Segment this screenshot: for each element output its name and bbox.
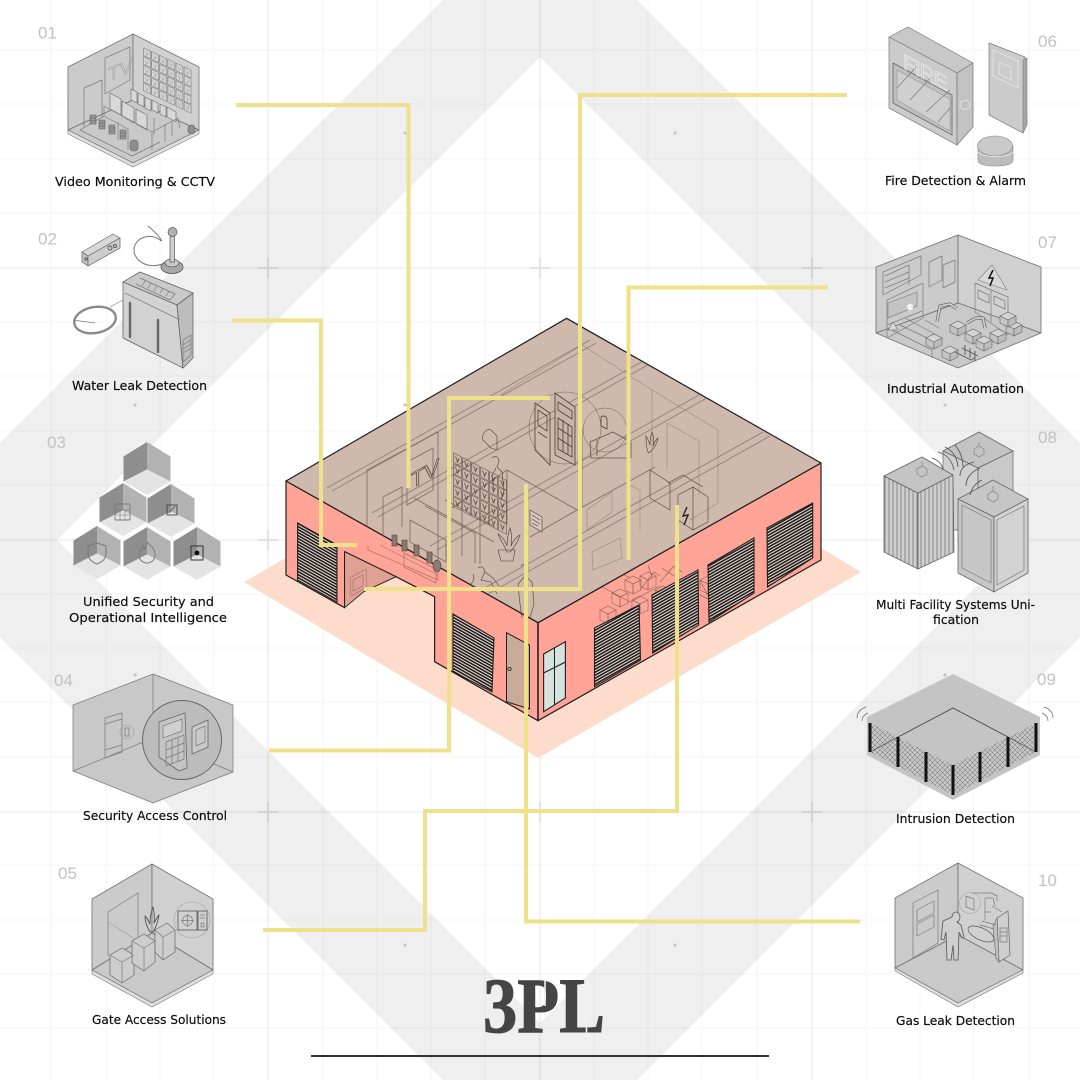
factory interior seen through right wall bbox=[368, 545, 720, 624]
connector: gate access bbox=[263, 505, 677, 930]
label: gate access solutions: Gate Access Solutions bbox=[92, 1012, 226, 1027]
label: multi facility bbox=[876, 597, 1035, 627]
number 10: 10 bbox=[1038, 871, 1057, 890]
number 02: 02 bbox=[38, 230, 57, 248]
shutter doors bbox=[298, 503, 813, 692]
roof bbox=[286, 318, 821, 623]
label: unified security bbox=[69, 594, 227, 625]
number 07: 07 bbox=[1038, 233, 1057, 252]
icon: industrial automation room bbox=[876, 235, 1041, 368]
label: multi facility: fication bbox=[933, 612, 979, 627]
number 08: 08 bbox=[1038, 428, 1057, 447]
interior: access panels bbox=[529, 392, 631, 465]
label: industrial automation: Industrial Automation bbox=[887, 381, 1024, 396]
item 05 bbox=[58, 864, 226, 1027]
item 09 bbox=[857, 670, 1056, 826]
icon: perimeter fence bbox=[857, 674, 1053, 800]
connector: security access bbox=[269, 398, 550, 750]
label: security access control: Security Access Control bbox=[83, 808, 227, 823]
title underline bbox=[311, 1055, 769, 1057]
interior: poster and door: TV bbox=[411, 455, 439, 495]
front corner edge bbox=[537, 623, 539, 721]
icon: gate access room bbox=[92, 864, 213, 1007]
icon: multi facility towers bbox=[884, 432, 1028, 592]
item 03 bbox=[47, 433, 227, 625]
label: unified security: Unified Security and bbox=[83, 594, 214, 609]
ground plane bbox=[244, 395, 861, 758]
item 01 bbox=[38, 24, 216, 189]
icon: water leak sensors bbox=[72, 226, 193, 368]
connector: water leak bbox=[232, 320, 357, 545]
right wall bbox=[538, 463, 821, 721]
label: water leak detection: Water Leak Detection bbox=[72, 378, 207, 393]
item 04 bbox=[54, 671, 233, 823]
item 02 bbox=[38, 226, 207, 393]
interior partitions bbox=[367, 345, 718, 585]
item 08 bbox=[876, 428, 1057, 627]
number 04: 04 bbox=[54, 671, 73, 690]
connector: video monitoring bbox=[236, 105, 408, 488]
label: multi facility: Multi Facility Systems Uni- bbox=[876, 597, 1035, 612]
icon: fire alarm devices bbox=[889, 27, 1027, 166]
door bbox=[506, 633, 530, 709]
number 05: 05 bbox=[58, 864, 77, 883]
connector lines bbox=[232, 95, 860, 930]
number 03: 03 bbox=[47, 433, 66, 452]
number 06: 06 bbox=[1038, 32, 1057, 51]
icon: security access room bbox=[73, 674, 233, 803]
icon: gas leak room bbox=[895, 863, 1023, 1007]
interior: video wall bbox=[392, 452, 507, 572]
label: fire detection: Fire Detection & Alarm bbox=[885, 173, 1026, 188]
icon: fire alarm devices: FIRE bbox=[903, 49, 948, 97]
building bbox=[244, 318, 861, 758]
label: unified security: Operational Intelligence bbox=[69, 610, 227, 625]
icon: unified security cubes bbox=[74, 442, 220, 580]
title: 3PL bbox=[483, 962, 605, 1049]
connector: industrial automation bbox=[628, 288, 828, 560]
connector: fire detection bbox=[364, 95, 847, 589]
item 10 bbox=[895, 863, 1057, 1028]
label: gas leak detection: Gas Leak Detection bbox=[896, 1013, 1015, 1028]
ceiling beams bbox=[327, 340, 770, 594]
interior: poster and door bbox=[383, 448, 439, 536]
label: intrusion detection: Intrusion Detection bbox=[896, 811, 1015, 826]
item 07 bbox=[876, 233, 1057, 396]
recessed entry bbox=[345, 552, 396, 608]
number 01: 01 bbox=[38, 24, 57, 42]
label: video monitoring: Video Monitoring & CCTV bbox=[55, 174, 216, 189]
item 06 bbox=[885, 27, 1057, 188]
icon: CCTV monitoring room bbox=[68, 34, 199, 167]
connector: gas leak bbox=[526, 484, 860, 922]
number 09: 09 bbox=[1037, 670, 1056, 689]
icon: CCTV monitoring room: TV bbox=[108, 55, 133, 87]
interior: plant and figures bbox=[471, 430, 542, 618]
left wall bbox=[286, 481, 538, 721]
window bbox=[544, 642, 565, 712]
interior: right rooms bbox=[646, 432, 708, 530]
